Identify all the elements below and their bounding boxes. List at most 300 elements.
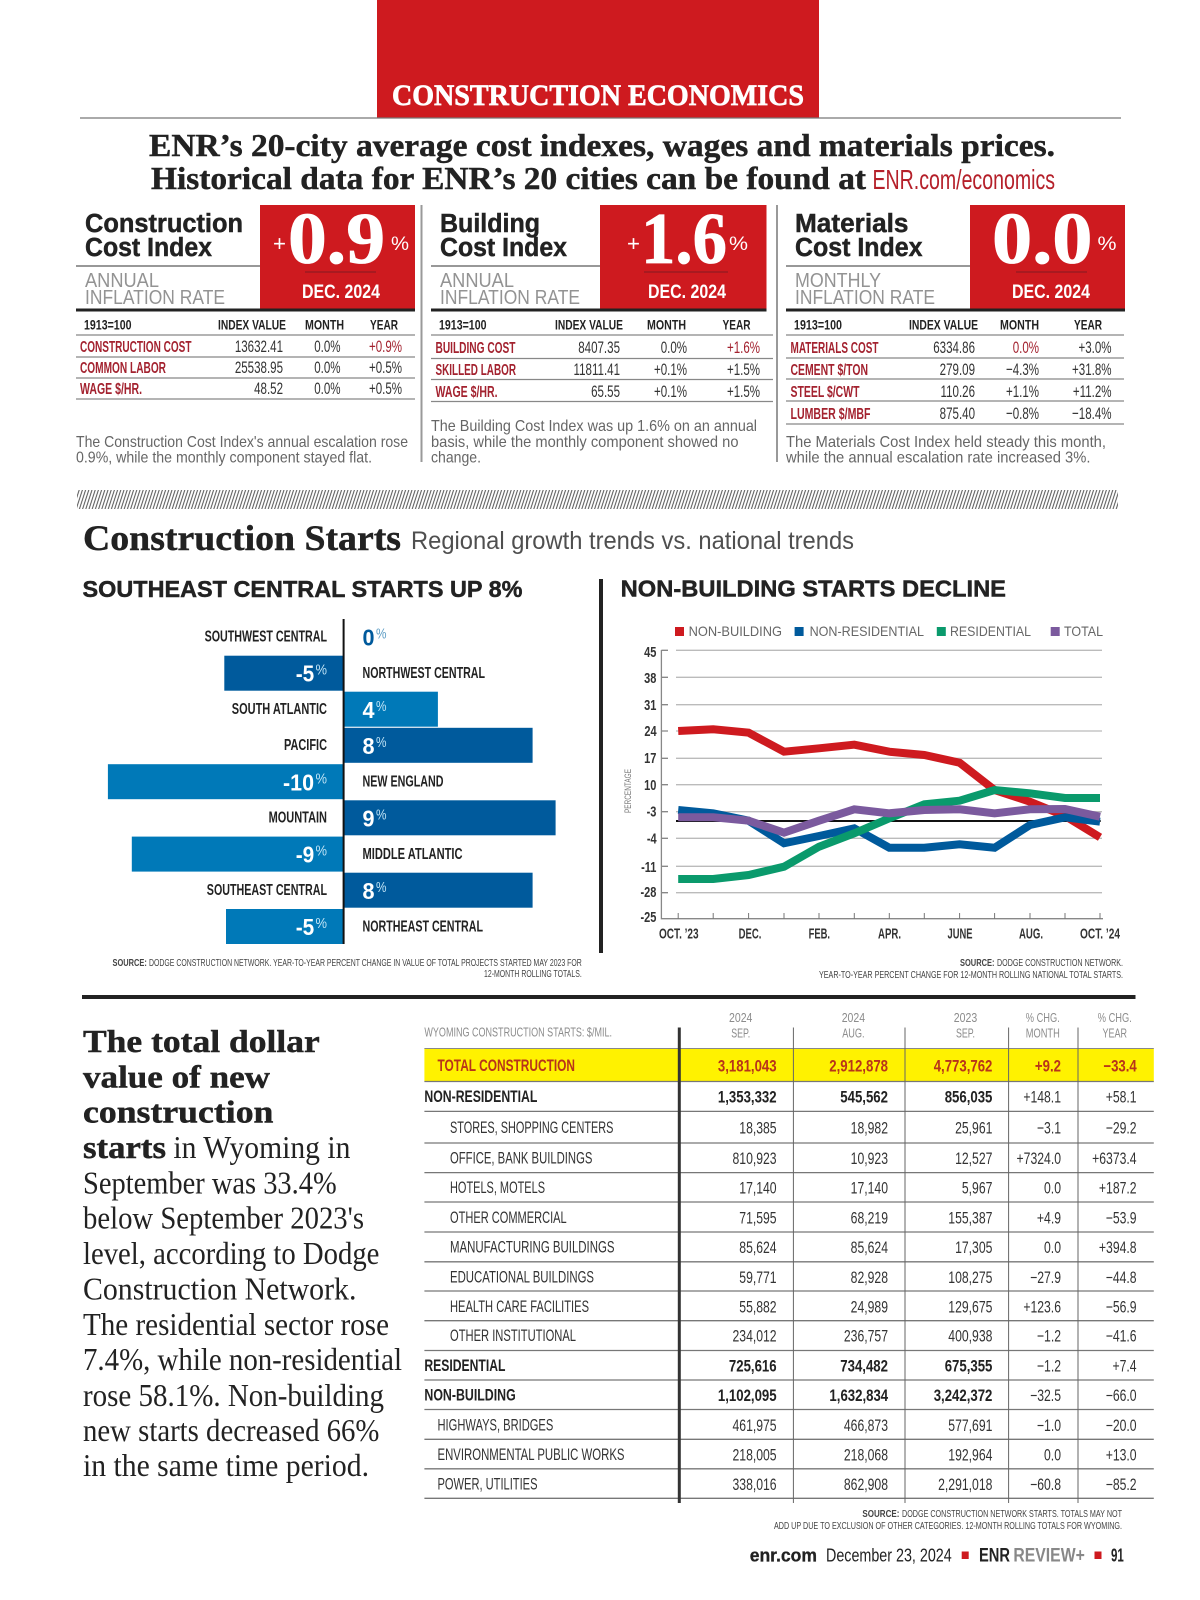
- bar chart: regional starts: 8: [362, 878, 375, 904]
- bar chart: regional starts: 4: [362, 697, 375, 723]
- rows: non-building subcategories: −60.8: [1030, 1477, 1061, 1495]
- panel: materials cost index: [785, 198, 1125, 466]
- bar chart: regional starts: SOUTHEAST CENTRAL: [207, 882, 327, 899]
- narrative text block: new starts decreased 66%: [83, 1412, 379, 1448]
- rows: non-residential subcategories: −3.1: [1037, 1120, 1061, 1138]
- rows: non-residential subcategories: 236,757: [844, 1328, 888, 1346]
- table: construction cost index values: YEAR: [370, 316, 398, 332]
- table column headers: [424, 1011, 1132, 1040]
- caption: basis, while the monthly component showed no: [431, 434, 739, 451]
- source note: table: [774, 1508, 1122, 1532]
- caption: change.: [431, 450, 481, 466]
- row: total construction: +9.2: [1035, 1057, 1061, 1076]
- source note: DODGE CONSTRUCTION NETWORK.: [997, 957, 1123, 969]
- y axis labels: [640, 643, 657, 925]
- rows: non-residential subcategories: 85,624: [739, 1239, 777, 1258]
- y axis title: PERCENTAGE: [623, 769, 633, 813]
- footer: 91: [1111, 1546, 1124, 1566]
- row: residential: [424, 1357, 1137, 1376]
- y axis labels: 17: [644, 749, 656, 766]
- rows: non-residential subcategories: 12,527: [955, 1150, 992, 1169]
- x axis labels: [659, 925, 1120, 942]
- rows: non-residential subcategories: −44.8: [1106, 1269, 1137, 1287]
- table: materials cost index values: +1.1%: [1006, 383, 1039, 402]
- rows: non-residential subcategories: 155,387: [948, 1210, 992, 1228]
- table column headers: YEAR: [1103, 1026, 1127, 1040]
- rows: non-residential subcategories: 400,938: [948, 1328, 992, 1346]
- rows: non-building subcategories: 2,291,018: [938, 1477, 992, 1495]
- rows: non-residential subcategories: MANUFACTURING BUILDINGS: [450, 1238, 614, 1256]
- row: residential: +7.4: [1113, 1358, 1137, 1376]
- table: materials cost index values: STEEL $/CWT: [790, 384, 860, 401]
- x axis labels: JUNE: [948, 925, 972, 942]
- table: materials cost index values: 0.0%: [1013, 339, 1039, 358]
- highlighted total row background: [424, 1048, 1154, 1082]
- subheading: annual inflation rate: [440, 269, 580, 309]
- rows: non-residential subcategories: +187.2: [1099, 1180, 1137, 1198]
- row: non-building: [424, 1386, 1137, 1406]
- table column headers: % CHG.: [1098, 1011, 1132, 1025]
- row: residential: 675,355: [945, 1357, 992, 1376]
- row: residential: −1.2: [1037, 1358, 1061, 1376]
- row: non-building: −32.5: [1030, 1387, 1061, 1406]
- bar chart: regional starts: MOUNTAIN: [269, 810, 327, 827]
- panel heading: construction cost index: Cost Index: [85, 234, 212, 262]
- y axis labels: -4: [647, 830, 657, 847]
- y axis labels: -11: [641, 858, 656, 875]
- row: residential: 734,482: [840, 1357, 888, 1376]
- legend: NON-RESIDENTIAL: [810, 623, 924, 639]
- series: non-residential: [678, 810, 1100, 848]
- bar chart: regional starts: -5: [296, 914, 314, 940]
- table: construction cost index values: WAGE $/HR.: [80, 381, 142, 398]
- table column headers: MONTH: [1026, 1026, 1060, 1040]
- bar chart: regional starts: -10: [283, 769, 314, 795]
- rows: non-residential subcategories: 0.0: [1044, 1180, 1061, 1198]
- subheading: annual inflation rate: ANNUAL: [85, 269, 159, 292]
- row: non-residential: 1,353,332: [718, 1088, 777, 1107]
- section banner: construction economics: CONSTRUCTION ECONOMICS: [392, 79, 804, 112]
- rows: non-residential subcategories: 234,012: [733, 1328, 777, 1346]
- bar chart: regional starts: %: [376, 879, 386, 896]
- table: building cost index values: YEAR: [722, 316, 750, 332]
- bar chart: regional starts: [108, 619, 556, 944]
- source note: table: SOURCE:: [862, 1508, 899, 1520]
- caption: 0.9%, while the monthly component stayed flat.: [76, 450, 372, 466]
- table: materials cost index values: 6334.86: [933, 339, 975, 358]
- narrative text block: construction: [83, 1094, 274, 1130]
- table: materials cost index values: 279.09: [940, 361, 975, 380]
- source note: [819, 957, 1123, 981]
- narrative text block: level, according to Dodge: [83, 1235, 379, 1271]
- bar chart: regional starts: -9: [296, 842, 314, 868]
- headline: Historical data for ENR’s 20 cities can be found at: [151, 160, 866, 196]
- rows: non-residential subcategories: 10,923: [851, 1150, 888, 1169]
- panel: national line chart: [621, 576, 1123, 981]
- rows: non-residential subcategories: +7324.0: [1017, 1150, 1061, 1169]
- rows: non-residential subcategories: OFFICE, BANK BUILDINGS: [450, 1150, 592, 1168]
- table: materials cost index values: 875.40: [940, 405, 975, 424]
- rows: non-building subcategories: POWER, UTILITIES: [438, 1476, 538, 1494]
- bar chart: regional starts: NEW ENGLAND: [362, 774, 444, 791]
- narrative text block: The residential sector rose: [83, 1306, 389, 1342]
- chart heading: non-building starts decline: NON-BUILDING STARTS DECLINE: [621, 576, 1006, 602]
- y axis labels: 10: [644, 776, 656, 793]
- table: materials cost index values: CEMENT $/TON: [790, 362, 868, 379]
- bar chart: regional starts: NORTHEAST CENTRAL: [362, 919, 483, 936]
- section heading: construction starts: Construction Starts: [83, 518, 401, 558]
- source note: SOURCE:: [960, 957, 994, 969]
- red callout: +1.6%: +: [627, 231, 640, 256]
- narrative text block: 7.4%, while non-residential: [83, 1341, 402, 1377]
- narrative text block: [83, 1023, 402, 1483]
- x axis labels: AUG.: [1019, 925, 1043, 942]
- red callout: +1.6%: [600, 198, 766, 311]
- rows: non-building subcategories: HIGHWAYS, BRIDGES: [438, 1416, 553, 1434]
- series: non-building: [678, 729, 1100, 837]
- rows: non-residential subcategories: HOTELS, MOTELS: [450, 1179, 545, 1197]
- red callout: +1.6%: DEC. 2024: [648, 282, 726, 303]
- panel: regional diverging bar chart: [82, 576, 582, 980]
- rows: non-residential subcategories: [450, 1119, 1137, 1346]
- source note: 12-MONTH ROLLING TOTALS.: [484, 968, 582, 980]
- source note: DODGE CONSTRUCTION NETWORK. YEAR-TO-YEAR PERCENT CHANGE IN VALUE OF TOTAL PROJECTS STARTED MAY 2023 FOR: [149, 957, 582, 969]
- table column headers: 2024: [842, 1011, 865, 1025]
- table: materials cost index values: −4.3%: [1006, 361, 1039, 380]
- table: building cost index values: +0.1%: [654, 383, 687, 402]
- table: materials cost index values: +11.2%: [1073, 383, 1112, 402]
- table: materials cost index values: −0.8%: [1006, 405, 1039, 424]
- row: non-building: 3,242,372: [934, 1387, 992, 1405]
- bar chart: regional starts: MIDDLE ATLANTIC: [362, 846, 462, 863]
- table: building cost index values: +1.6%: [727, 339, 760, 358]
- bar chart: regional starts: 8: [362, 733, 375, 759]
- rows: non-building subcategories: 338,016: [733, 1477, 777, 1495]
- panel heading: materials cost index: [795, 210, 922, 262]
- rows: non-residential subcategories: OTHER COMMERCIAL: [450, 1209, 567, 1227]
- table: construction cost index values: [76, 316, 415, 399]
- rows: non-residential subcategories: 59,771: [739, 1269, 777, 1287]
- row: residential: 725,616: [729, 1357, 777, 1376]
- rows: non-residential subcategories: 17,140: [851, 1180, 888, 1198]
- rows: non-residential subcategories: +6373.4: [1092, 1150, 1137, 1169]
- table: building cost index values: 65.55: [591, 383, 620, 402]
- table: materials cost index values: YEAR: [1074, 316, 1102, 332]
- rows: non-residential subcategories: −27.9: [1030, 1269, 1061, 1287]
- subheading: annual inflation rate: INFLATION RATE: [440, 286, 580, 309]
- table: construction cost index values: +0.5%: [369, 359, 402, 378]
- table: building cost index values: +1.5%: [727, 383, 760, 402]
- table: construction cost index values: COMMON LABOR: [80, 360, 166, 377]
- table: construction cost index values: INDEX VALUE: [218, 316, 286, 332]
- table: building cost index values: MONTH: [647, 316, 686, 332]
- subheading: monthly inflation rate: [795, 269, 935, 309]
- caption: [76, 434, 408, 466]
- table: building cost index values: INDEX VALUE: [555, 316, 623, 332]
- footer: December 23, 2024: [826, 1546, 952, 1566]
- table column headers: 2024: [729, 1011, 752, 1025]
- bar chart: regional starts: -5: [296, 660, 314, 686]
- rows: non-residential subcategories: 108,275: [948, 1269, 992, 1287]
- narrative text block: in the same time period.: [83, 1447, 369, 1483]
- table column headers: AUG.: [842, 1026, 865, 1040]
- subheading: monthly inflation rate: MONTHLY: [795, 269, 881, 292]
- narrative text block: in Wyoming in: [173, 1129, 350, 1165]
- panel heading: materials cost index: Cost Index: [795, 234, 922, 262]
- panel heading: building cost index: Building: [440, 210, 540, 238]
- series: residential: [678, 790, 1100, 879]
- table: building cost index values: 8407.35: [578, 339, 620, 358]
- rows: non-residential subcategories: +123.6: [1023, 1299, 1061, 1317]
- rows: non-building subcategories: 192,964: [948, 1447, 992, 1465]
- table: building cost index values: SKILLED LABOR: [436, 362, 516, 379]
- row: non-building: NON-BUILDING: [424, 1386, 516, 1404]
- rows: non-residential subcategories: 17,305: [955, 1239, 992, 1258]
- rows: non-residential subcategories: OTHER INSTITUTIONAL: [450, 1327, 576, 1345]
- rows: non-building subcategories: 466,873: [844, 1417, 888, 1436]
- bar chart: regional starts: 9: [362, 806, 374, 832]
- table column headers: WYOMING CONSTRUCTION STARTS: $/MIL.: [424, 1026, 612, 1040]
- table: construction cost index values: 0.0%: [314, 359, 341, 378]
- rows: non-residential subcategories: −1.2: [1037, 1328, 1061, 1346]
- rows: non-building subcategories: 862,908: [844, 1477, 888, 1495]
- red callout: 0.0%: [970, 198, 1125, 311]
- bar chart: regional starts: SOUTHWEST CENTRAL: [205, 629, 327, 646]
- bar chart: regional starts: %: [316, 770, 327, 787]
- red callout: +0.9%: %: [391, 234, 409, 255]
- rows: non-building subcategories: ENVIRONMENTAL PUBLIC WORKS: [438, 1446, 624, 1464]
- chart heading: southeast central starts up 8%: SOUTHEAST CENTRAL STARTS UP 8%: [82, 576, 522, 602]
- red callout: +0.9%: 0.9: [288, 198, 385, 279]
- rows: non-building subcategories: +13.0: [1106, 1447, 1137, 1465]
- rows: non-residential subcategories: −53.9: [1106, 1210, 1137, 1228]
- narrative text block: rose 58.1%. Non-building: [83, 1377, 384, 1413]
- row: non-building: 1,632,834: [829, 1387, 889, 1405]
- x axis labels: DEC.: [739, 925, 761, 942]
- rows: non-residential subcategories: 55,882: [739, 1299, 777, 1317]
- subheading: annual inflation rate: ANNUAL: [440, 269, 514, 292]
- rows: non-residential subcategories: 17,140: [739, 1180, 777, 1198]
- bar chart: regional starts: %: [316, 662, 327, 678]
- bar chart: regional starts: %: [376, 698, 386, 715]
- table column headers: SEP.: [956, 1026, 975, 1040]
- rows: non-residential subcategories: 85,624: [851, 1239, 888, 1258]
- x axis labels: OCT. ’24: [1080, 925, 1120, 942]
- headline: ENR.com/economics: [872, 164, 1055, 195]
- footer: ENR: [979, 1546, 1010, 1566]
- table: construction cost index values: 1913=100: [84, 316, 132, 332]
- source note: [112, 957, 582, 980]
- narrative text block: The total dollar: [83, 1023, 320, 1059]
- red callout: +0.9%: +: [273, 231, 286, 256]
- source note: SOURCE:: [112, 957, 147, 969]
- legend: NON-BUILDING: [689, 623, 782, 639]
- rows: non-building subcategories: 218,005: [733, 1447, 777, 1465]
- y axis labels: -28: [640, 883, 656, 900]
- table: construction cost index values: CONSTRUCTION COST: [80, 339, 192, 356]
- narrative text block: value of new: [83, 1058, 270, 1094]
- table: wyoming construction starts: [424, 1011, 1154, 1503]
- rows: non-building subcategories: 0.0: [1044, 1447, 1061, 1465]
- red callout: +1.6%: %: [729, 234, 748, 255]
- red callout: 0.0%: %: [1098, 234, 1117, 255]
- row: non-residential: 545,562: [840, 1088, 888, 1107]
- table: materials cost index values: [786, 316, 1124, 424]
- row: total construction: −33.4: [1103, 1057, 1137, 1076]
- rows: non-building subcategories: [438, 1416, 1137, 1495]
- rows: non-residential subcategories: +394.8: [1099, 1239, 1137, 1258]
- table: building cost index values: 0.0%: [661, 339, 687, 358]
- panel heading: building cost index: Cost Index: [440, 234, 567, 262]
- table: materials cost index values: MATERIALS COST: [790, 340, 879, 357]
- red callout: +0.9%: [260, 198, 415, 311]
- table column headers: 2023: [954, 1011, 977, 1025]
- section heading: construction starts: [83, 518, 854, 558]
- rows: non-residential subcategories: −56.9: [1106, 1299, 1137, 1317]
- bar chart: regional starts: SOUTH ATLANTIC: [232, 701, 327, 718]
- row: non-residential: +58.1: [1106, 1089, 1137, 1107]
- x axis labels: OCT. ’23: [659, 925, 699, 942]
- row: residential: RESIDENTIAL: [424, 1357, 505, 1375]
- panel heading: building cost index: [440, 210, 567, 262]
- y axis labels: 45: [644, 643, 656, 660]
- bar chart: regional starts: PACIFIC: [284, 737, 327, 754]
- bar chart: regional starts: %: [376, 734, 386, 751]
- bar chart: regional starts: 0: [362, 624, 374, 650]
- row: non-building: 1,102,095: [718, 1387, 777, 1405]
- rows: non-building subcategories: 218,068: [844, 1447, 888, 1465]
- rows: non-residential subcategories: 68,219: [851, 1210, 888, 1228]
- subheading: monthly inflation rate: INFLATION RATE: [795, 286, 935, 309]
- subheading: annual inflation rate: [85, 269, 225, 309]
- table: materials cost index values: +3.0%: [1078, 339, 1112, 358]
- bar chart: regional starts: %: [376, 806, 386, 824]
- table: construction cost index values: 0.0%: [314, 338, 341, 357]
- y axis labels: 31: [644, 696, 656, 713]
- y axis labels: -3: [647, 803, 656, 820]
- row: non-residential: +148.1: [1023, 1089, 1061, 1107]
- table: materials cost index values: +31.8%: [1072, 361, 1112, 380]
- legend: RESIDENTIAL: [950, 623, 1031, 639]
- red callout: 0.0%: DEC. 2024: [1012, 282, 1090, 303]
- bar chart: regional starts: %: [316, 843, 327, 860]
- table: building cost index values: 1913=100: [439, 316, 487, 332]
- rows: non-residential subcategories: +4.9: [1037, 1210, 1061, 1228]
- narrative text block: September was 33.4%: [83, 1164, 337, 1200]
- row: total construction: 3,181,043: [718, 1057, 777, 1076]
- caption: The Building Cost Index was up 1.6% on an annual: [431, 418, 757, 435]
- panel heading: materials cost index: Materials: [795, 210, 908, 238]
- red callout: 0.0%: 0.0: [992, 198, 1092, 279]
- rows: non-residential subcategories: 129,675: [948, 1299, 992, 1317]
- rows: non-residential subcategories: −29.2: [1106, 1120, 1137, 1138]
- table: construction cost index values: 13632.41: [235, 338, 283, 357]
- table: construction cost index values: MONTH: [305, 316, 344, 332]
- rows: non-residential subcategories: 0.0: [1044, 1239, 1061, 1258]
- rows: non-residential subcategories: 71,595: [739, 1210, 777, 1228]
- rows: non-residential subcategories: −41.6: [1106, 1328, 1137, 1346]
- rows: non-building subcategories: −85.2: [1106, 1477, 1137, 1495]
- table: building cost index values: WAGE $/HR.: [436, 384, 498, 401]
- narrative text block: below September 2023's: [83, 1200, 364, 1236]
- row: non-building: −66.0: [1106, 1387, 1137, 1406]
- rows: non-building subcategories: 461,975: [733, 1417, 777, 1436]
- table: materials cost index values: INDEX VALUE: [909, 316, 978, 332]
- caption: The Construction Cost Index's annual escalation rose: [76, 434, 408, 451]
- table: building cost index values: BUILDING COST: [436, 340, 516, 357]
- caption: [785, 434, 1106, 466]
- rows: non-building subcategories: −1.0: [1037, 1417, 1061, 1436]
- table: building cost index values: +1.5%: [727, 361, 760, 380]
- table column headers: % CHG.: [1026, 1011, 1060, 1025]
- y axis labels: 38: [644, 669, 656, 686]
- table: materials cost index values: 110.26: [941, 383, 975, 402]
- table: construction cost index values: +0.5%: [369, 380, 402, 399]
- section heading: construction starts: Regional growth trends vs. national trends: [411, 527, 854, 555]
- table: construction cost index values: +0.9%: [369, 338, 402, 357]
- row: total construction: TOTAL CONSTRUCTION: [438, 1057, 575, 1075]
- table: materials cost index values: −18.4%: [1072, 405, 1112, 424]
- rows: non-residential subcategories: EDUCATIONAL BUILDINGS: [450, 1268, 594, 1286]
- table column headers: SEP.: [731, 1026, 750, 1040]
- row: total construction: 4,773,762: [934, 1057, 992, 1076]
- row: non-residential: NON-RESIDENTIAL: [424, 1088, 537, 1106]
- table: building cost index values: +0.1%: [654, 361, 687, 380]
- table: building cost index values: 11811.41: [574, 361, 620, 380]
- rows: non-building subcategories: −20.0: [1106, 1417, 1137, 1436]
- bar chart: regional starts: NORTHWEST CENTRAL: [362, 665, 485, 682]
- narrative text block: Construction Network.: [83, 1270, 356, 1306]
- caption: [431, 418, 757, 466]
- bar chart: regional starts: %: [376, 626, 386, 642]
- rows: non-residential subcategories: STORES, SHOPPING CENTERS: [450, 1119, 613, 1137]
- legend: TOTAL: [1064, 623, 1103, 639]
- footer: enr.com: [750, 1546, 817, 1566]
- section banner: construction economics: [377, 0, 819, 118]
- rows: non-residential subcategories: 82,928: [851, 1269, 888, 1287]
- rows: non-residential subcategories: 24,989: [851, 1299, 888, 1317]
- panel heading: construction cost index: [85, 210, 243, 262]
- panel: building cost index: [431, 198, 773, 466]
- rows: non-residential subcategories: HEALTH CARE FACILITIES: [450, 1298, 589, 1316]
- narrative text block: starts: [83, 1129, 166, 1165]
- red callout: +0.9%: DEC. 2024: [302, 282, 380, 303]
- row: non-residential: 856,035: [945, 1088, 992, 1107]
- footer: REVIEW+: [1013, 1546, 1085, 1566]
- table: construction cost index values: 25538.95: [235, 359, 283, 378]
- headline: ENR’s 20-city average cost indexes, wages and materials prices.: [149, 127, 1055, 163]
- table: building cost index values: [431, 316, 773, 402]
- subheading: annual inflation rate: INFLATION RATE: [85, 286, 225, 309]
- row: total construction: 2,912,878: [829, 1057, 888, 1076]
- series: total: [678, 809, 1100, 833]
- caption: while the annual escalation rate increased 3%.: [785, 450, 1090, 466]
- table: construction cost index values: 0.0%: [314, 380, 341, 399]
- y axis labels: -25: [640, 908, 656, 925]
- bar chart: regional starts: %: [316, 915, 327, 932]
- red callout: +1.6%: 1.6: [641, 198, 727, 279]
- panel heading: construction cost index: Construction: [85, 210, 243, 238]
- table: materials cost index values: MONTH: [1000, 316, 1039, 332]
- row: non-residential: [424, 1088, 1137, 1107]
- rows: non-residential subcategories: 5,967: [962, 1180, 992, 1198]
- footer: [750, 1546, 1124, 1566]
- x axis labels: FEB.: [809, 925, 830, 942]
- table: materials cost index values: 1913=100: [794, 316, 842, 332]
- table: materials cost index values: LUMBER $/MBF: [790, 406, 870, 423]
- x axis labels: APR.: [878, 925, 901, 942]
- panel: construction cost index: [76, 198, 415, 466]
